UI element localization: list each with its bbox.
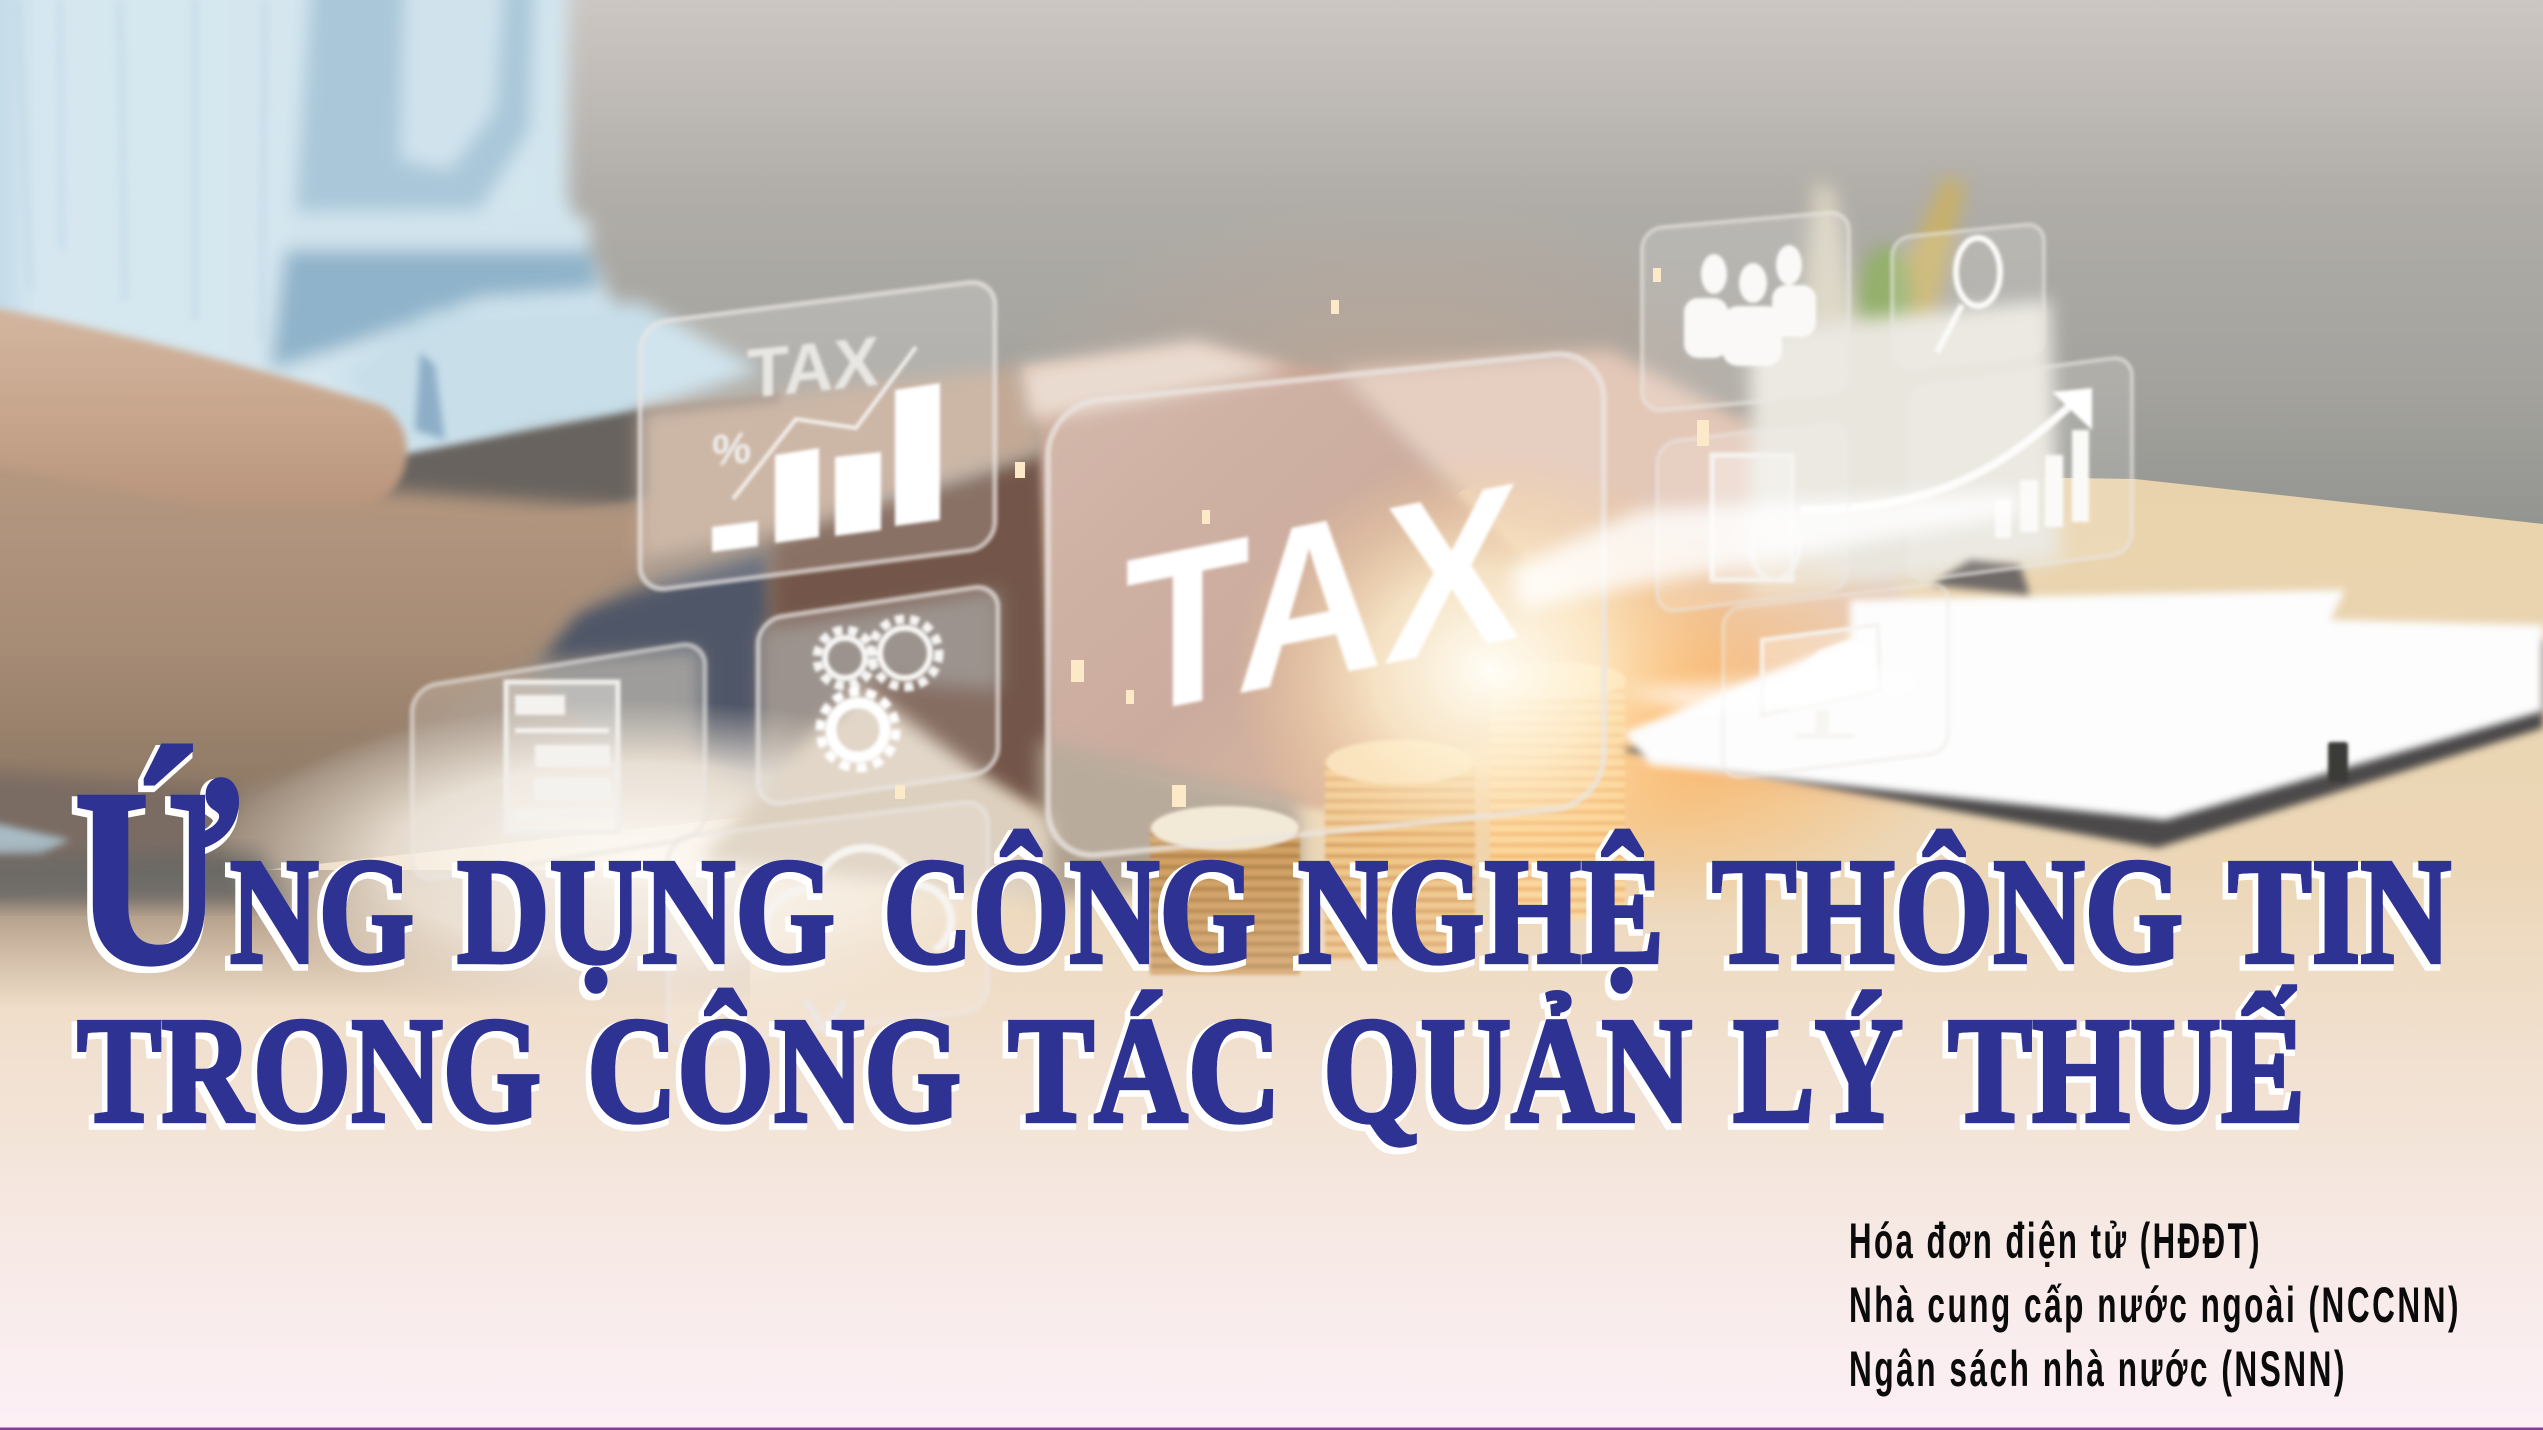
phone	[330, 395, 780, 525]
title line 2: QUẢN	[1323, 986, 1692, 1154]
coin stacks	[1150, 662, 1626, 975]
trend line	[733, 347, 916, 499]
title line 2: LÝ	[1733, 986, 1903, 1154]
title line 1	[74, 737, 2451, 1017]
right hand	[1021, 347, 1545, 810]
warm wall reflection	[980, 200, 1820, 640]
title line 2: THUẾ	[1948, 986, 2305, 1154]
grey-brown lower left	[0, 770, 240, 870]
coin stack 2	[1325, 740, 1475, 960]
lower left backing	[0, 500, 1700, 920]
abbreviations legend	[1849, 1213, 2461, 1397]
lower light streak	[1620, 670, 1930, 715]
coin stack 1	[1150, 806, 1300, 975]
bars	[712, 383, 940, 552]
grey-beige lower TAX card	[1040, 740, 1300, 900]
fingertip highlight	[1021, 340, 1290, 420]
pinkish wall behind TAX card	[1337, 350, 1900, 800]
clipboard ring	[2230, 752, 2320, 770]
wooden table	[0, 470, 2543, 1430]
card: TAX	[1048, 349, 1604, 860]
title line 2	[77, 986, 2305, 1154]
title line 2: TÁC	[1008, 986, 1281, 1154]
card: document	[412, 641, 705, 883]
orange glow at coins	[1400, 520, 1960, 920]
cuff fold	[415, 352, 445, 440]
plant	[1800, 175, 1965, 355]
abbreviations legend: Hóa đơn điện tử (HĐĐT)	[1849, 1213, 2262, 1269]
title line 1: Ứ	[74, 737, 239, 1017]
grey behind document card	[530, 635, 720, 745]
hand behind the chart card	[640, 367, 1045, 560]
title	[74, 737, 2451, 1154]
card: search	[1892, 223, 2044, 372]
title line 1: NG	[230, 827, 414, 995]
bottom purple rule	[0, 1428, 2543, 1430]
title line 2: TRONG	[77, 986, 541, 1154]
title line 1: TIN	[2228, 827, 2451, 995]
title line 1: DỤNG	[457, 827, 835, 995]
coin stack 3	[1490, 662, 1626, 920]
clipboard binder	[1622, 640, 2543, 848]
card: cloud	[668, 800, 988, 1048]
left hand finger	[0, 303, 407, 505]
warm light burst	[1230, 450, 1750, 890]
title line 2: CÔNG	[587, 986, 961, 1154]
binder clip	[2328, 742, 2348, 782]
left blue sliver	[0, 822, 70, 855]
light streak	[1510, 490, 2020, 610]
title line 1: CÔNG	[883, 827, 1256, 995]
big TAX label: TAX	[1125, 434, 1520, 765]
card: monitor	[1723, 582, 1948, 779]
card: chart	[640, 279, 995, 592]
table glow near hand	[220, 700, 1060, 1020]
shirt	[0, 0, 760, 470]
percent label: %	[712, 423, 751, 476]
dark table shadow left	[0, 870, 750, 1010]
left hand palm	[0, 440, 660, 850]
grey behind gears	[760, 590, 1000, 790]
dark brown torso gap	[770, 450, 1060, 820]
lower sleeve and trousers	[540, 550, 780, 800]
card: rising chart	[1800, 356, 2132, 582]
glass cards	[412, 211, 2132, 1048]
dark object on paper	[1930, 560, 2030, 595]
title line 1: THÔNG	[1712, 827, 2183, 995]
shirt left stripes	[18, 0, 265, 340]
wall	[0, 0, 2543, 560]
small tax label: TAX	[747, 321, 879, 413]
light diagonal table patch	[700, 685, 1050, 900]
flower pot	[1750, 300, 2060, 600]
bottom fade	[0, 860, 2543, 1430]
card: people	[1642, 211, 1849, 412]
title line 1: NGHỆ	[1298, 827, 1664, 995]
sparkles	[895, 268, 1709, 807]
dark shadow left of U	[0, 850, 300, 905]
paper sheets	[1624, 590, 2543, 820]
card: gears	[758, 584, 998, 807]
card: clipboard	[1657, 419, 1849, 613]
